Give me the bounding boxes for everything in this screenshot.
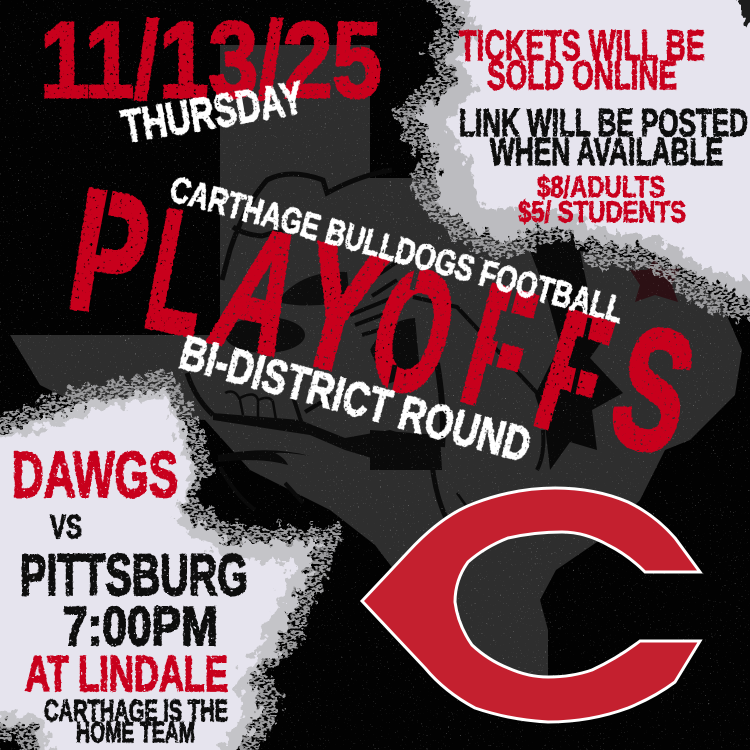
team: dawgs: DAWGS	[12, 438, 178, 511]
panel: bottom left brush	[0, 372, 345, 750]
star: black	[526, 236, 623, 470]
playoffs headline	[69, 186, 692, 453]
home team note: CARTHAGE IS THE	[44, 693, 228, 728]
playoffs headline: L	[133, 173, 225, 372]
star: red	[630, 258, 680, 302]
link notice	[459, 102, 748, 174]
game time: 7:00PM	[63, 595, 218, 657]
team: pittsburg: PITTSBURG	[20, 543, 248, 608]
tickets heading	[459, 22, 705, 98]
playoffs headline: A	[192, 193, 329, 390]
home team note	[44, 693, 228, 749]
playoffs headline: F	[446, 248, 550, 448]
home team note: HOME TEAM	[76, 717, 195, 749]
playoffs headline: Y	[277, 207, 399, 412]
ticket prices	[518, 171, 686, 229]
playoffs headline: O	[352, 229, 474, 434]
logo: red c	[362, 488, 700, 722]
ticket prices: $5/ STUDENTS	[518, 196, 686, 229]
vs: VS	[50, 508, 82, 545]
ticket prices: $8/ADULTS	[537, 171, 665, 204]
bi-district round: BI-DISTRICT ROUND	[174, 326, 536, 473]
bulldog mascot linework	[187, 170, 543, 520]
playoffs headline: F	[518, 274, 628, 474]
playoffs headline: P	[58, 153, 161, 354]
venue: AT LINDALE	[25, 646, 228, 702]
date: 11/13/25	[40, 0, 382, 120]
day: thursday: THURSDAY	[118, 71, 307, 153]
panel: top right brush	[392, 0, 750, 327]
